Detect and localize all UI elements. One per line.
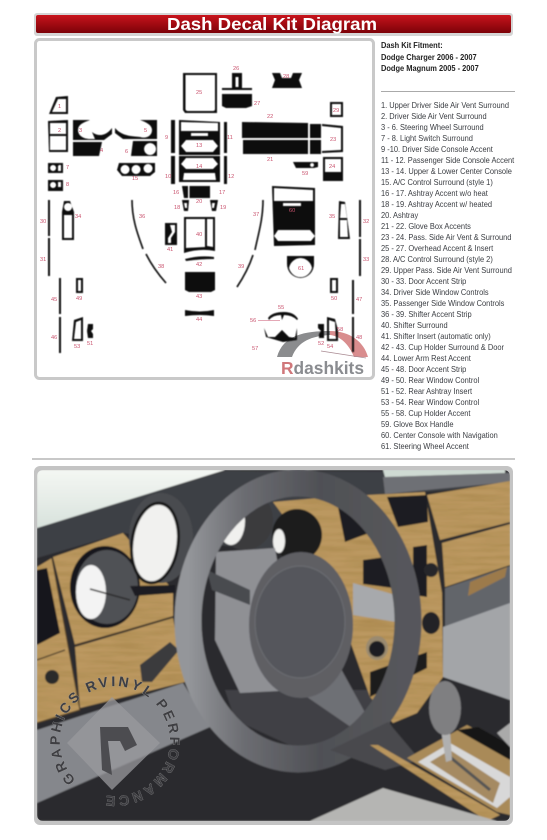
parts list: 2. Driver Side Air Vent Surround <box>381 112 487 121</box>
top right windshield strip <box>383 470 505 477</box>
parts list: 42 - 43. Cup Holder Surround & Door <box>381 343 504 352</box>
watermark: GRAPHICS RVINYL PERFORMANCE <box>50 676 180 806</box>
parts list: 49 - 50. Rear Window Control <box>381 376 479 385</box>
panel: decal diagram <box>36 40 374 378</box>
pieces 21 22 23: glove box <box>242 122 321 154</box>
parts list: 28. A/C Control Surround (style 2) <box>381 255 493 264</box>
logo: Rdashkits: Rdashkits <box>281 358 364 378</box>
parts list: 41. Shifter Insert (automatic only) <box>381 332 491 341</box>
gauge: right <box>272 509 322 561</box>
upper dash <box>37 471 510 560</box>
part number labels: 60 <box>289 208 295 214</box>
part number labels: 16 <box>173 190 179 196</box>
title banner: Dash Decal Kit Diagram <box>167 14 377 34</box>
part number labels: 43 <box>196 294 202 300</box>
stalks <box>130 585 175 596</box>
part number labels: 31 <box>40 257 46 263</box>
logo: Rdashkits <box>277 331 368 378</box>
fitment text: Dash Kit Fitment: <box>381 41 443 50</box>
part number labels: 45 <box>51 297 57 303</box>
piece 1: upper driver vent surround <box>49 96 68 114</box>
part number labels: 59 <box>302 171 308 177</box>
piece 40: shifter surround <box>184 217 215 253</box>
part number labels: 3 <box>79 128 82 134</box>
piece 15: AC surround <box>117 163 155 176</box>
parts list: 9 -10. Driver Side Console Accent <box>381 145 494 154</box>
piece 50 <box>330 278 338 293</box>
pieces 3 and 4: steering surround left <box>73 120 112 140</box>
parts list: 34. Driver Side Window Controls <box>381 288 489 297</box>
gauge: left <box>70 546 140 628</box>
part number labels: 46 <box>51 335 57 341</box>
right door and seat <box>445 566 510 627</box>
radio controls <box>363 545 427 597</box>
piece 42 <box>185 256 214 261</box>
part number labels: 37 <box>253 212 259 218</box>
left vent and lower dash <box>37 568 60 645</box>
parts list: 16 - 17. Ashtray Accent w/o heat <box>381 189 489 198</box>
piece 28 <box>272 73 302 88</box>
piece 54 <box>327 317 338 341</box>
part number labels: 39 <box>238 264 244 270</box>
parts list: 3 - 6. Steering Wheel Surround <box>381 123 484 132</box>
windshield <box>37 470 225 528</box>
part number labels: 52 <box>318 341 324 347</box>
piece 6 with circle hole <box>131 141 157 156</box>
parts list: 21 - 22. Glove Box Accents <box>381 222 471 231</box>
part number labels: 28 <box>283 74 289 80</box>
parts list: 40. Shifter Surround <box>381 321 448 330</box>
parts list: 36 - 39. Shifter Accent Strip <box>381 310 472 319</box>
piece 41: shifter insert <box>165 223 177 245</box>
parts list: 59. Glove Box Handle <box>381 420 454 429</box>
part number labels: 14 <box>196 164 202 170</box>
part number labels: 29 <box>333 108 339 114</box>
parts list: 1. Upper Driver Side Air Vent Surround <box>381 101 509 110</box>
part number labels: 5 <box>144 128 147 134</box>
part number labels: 47 <box>356 297 362 303</box>
parts list: 23 - 24. Pass. Side Air Vent & Surround <box>381 233 511 242</box>
fitment text <box>381 41 479 73</box>
piece 35: passenger window controls <box>338 201 350 239</box>
wood seams <box>37 558 173 723</box>
fitment text: Dodge Charger 2006 - 2007 <box>381 53 477 62</box>
piece 43 <box>185 272 215 292</box>
part number labels: 50 <box>331 296 337 302</box>
parts list: 13 - 14. Upper & Lower Center Console <box>381 167 512 176</box>
part number labels: 27 <box>254 101 260 107</box>
parts list: 29. Upper Pass. Side Air Vent Surround <box>381 266 512 275</box>
piece 29 <box>330 102 343 117</box>
part number labels: 11 <box>227 135 233 141</box>
part number labels: 38 <box>158 264 164 270</box>
fitment text: Dodge Magnum 2005 - 2007 <box>381 64 479 73</box>
steering wheel spokes and hub <box>207 548 403 732</box>
part number labels: 17 <box>219 190 225 196</box>
part number labels: 53 <box>74 344 80 350</box>
photo frame <box>34 466 513 825</box>
part number labels: 21 <box>267 157 273 163</box>
piece 13: upper console <box>179 120 220 155</box>
parts list: 25 - 27. Overhead Accent & Insert <box>381 244 494 253</box>
photo: dashboard interior <box>37 470 510 821</box>
part number labels: 48 <box>356 335 362 341</box>
part number labels: 10 <box>165 174 171 180</box>
piece 60: center console with navigation <box>272 186 315 246</box>
parts list: 53 - 54. Rear Window Control <box>381 398 479 407</box>
part number labels: 36 <box>139 214 145 220</box>
left wood panels <box>37 481 510 723</box>
piece 59 <box>293 162 318 168</box>
part number labels: 6 <box>125 149 128 155</box>
wheel opening backdrop <box>225 690 372 746</box>
part number labels: 19 <box>220 205 226 211</box>
decal pieces <box>48 73 361 353</box>
parts list: 20. Ashtray <box>381 211 418 220</box>
part number labels: 33 <box>363 257 369 263</box>
piece 57 <box>264 328 297 342</box>
part number labels: 41 <box>167 247 173 253</box>
piece 23 outline <box>322 124 343 153</box>
part number labels: 25 <box>196 90 202 96</box>
piece 53 <box>72 317 83 341</box>
parts list: 7 - 8. Light Switch Surround <box>381 134 473 143</box>
part number labels: 30 <box>40 219 46 225</box>
parts list: 35. Passenger Side Window Controls <box>381 299 504 308</box>
part number labels <box>40 66 369 352</box>
piece 14: lower console <box>179 156 220 182</box>
parts list: 18 - 19. Ashtray Accent w/ heated <box>381 200 492 209</box>
shifter knob <box>429 681 461 762</box>
piece 27 <box>222 88 252 108</box>
parts list: 11 - 12. Passenger Side Console Accent <box>381 156 515 165</box>
part number labels: 15 <box>132 176 138 182</box>
part number labels: 56 <box>250 318 256 324</box>
piece 61: steering wheel accent <box>287 256 314 278</box>
piece 51 <box>87 324 93 338</box>
part number labels: 20 <box>196 199 202 205</box>
gauge: speedometer <box>127 493 193 586</box>
parts list: 45 - 48. Door Accent Strip <box>381 365 467 374</box>
title banner <box>34 13 513 36</box>
parts list: 30 - 33. Door Accent Strip <box>381 277 467 286</box>
parts list: 55 - 58. Cup Holder Accent <box>381 409 471 418</box>
part number labels: 18 <box>174 205 180 211</box>
piece 8: light switch surround <box>48 180 63 191</box>
parts list: 60. Center Console with Navigation <box>381 431 498 440</box>
pieces 18 19 <box>182 200 218 211</box>
part number labels: 57 <box>252 346 258 352</box>
pieces 16 17 20: ashtray <box>182 186 210 198</box>
part number labels: 23 <box>330 137 336 143</box>
piece 44 <box>185 310 214 316</box>
piece 7: light switch surround <box>48 163 63 173</box>
part number labels: 24 <box>329 164 335 170</box>
parts list <box>381 101 515 451</box>
piece 5 <box>115 120 157 139</box>
part number labels: 40 <box>196 232 202 238</box>
piece 52 <box>318 324 324 338</box>
part number labels: 55 <box>278 305 284 311</box>
piece 24 <box>323 157 343 181</box>
piece 4 <box>73 142 102 156</box>
part number labels: 35 <box>329 214 335 220</box>
piece 49 <box>76 278 83 293</box>
piece 26 <box>232 73 242 88</box>
parts list: 15. A/C Control Surround (style 1) <box>381 178 493 187</box>
part number labels: 44 <box>196 317 202 323</box>
air vents <box>337 495 428 542</box>
part number labels: 22 <box>267 114 273 120</box>
part number labels: 8 <box>66 182 69 188</box>
piece 55 <box>268 312 298 320</box>
part number labels: 4 <box>100 148 103 154</box>
part number labels: 2 <box>58 128 61 134</box>
piece 2: driver vent surround <box>48 120 68 152</box>
piece 34: driver window controls <box>62 201 74 240</box>
part number labels: 54 <box>327 344 333 350</box>
part number labels: 32 <box>363 219 369 225</box>
part number labels: 7 <box>66 165 69 171</box>
shifter bezel <box>407 723 510 815</box>
pieces 9 10 11 12: console accents <box>171 120 227 184</box>
parts list: 51 - 52. Rear Ashtray Insert <box>381 387 473 396</box>
part number labels: 51 <box>87 341 93 347</box>
shifter strips 36 37 38 39 <box>132 200 263 287</box>
part number labels: 13 <box>196 143 202 149</box>
part number labels: 26 <box>233 66 239 72</box>
top right band <box>383 473 510 494</box>
part number labels: 9 <box>165 135 168 141</box>
part number labels: 1 <box>58 104 61 110</box>
part number labels: 12 <box>228 174 234 180</box>
console wood strip and seat <box>330 722 420 770</box>
part number labels: 58 <box>337 327 343 333</box>
door strips 30 31 32 33 45 46 47 48 <box>48 200 361 353</box>
steering wheel rim <box>188 483 408 759</box>
gauge: tachometer <box>223 516 246 550</box>
parts list: 44. Lower Arm Rest Accent <box>381 354 472 363</box>
part number labels: 61 <box>298 266 304 272</box>
part number labels: 42 <box>196 262 202 268</box>
part number labels: 49 <box>76 296 82 302</box>
piece 25: overhead accent <box>183 73 217 113</box>
parts list: 61. Steering Wheel Accent <box>381 442 470 451</box>
part number labels: 34 <box>75 214 81 220</box>
